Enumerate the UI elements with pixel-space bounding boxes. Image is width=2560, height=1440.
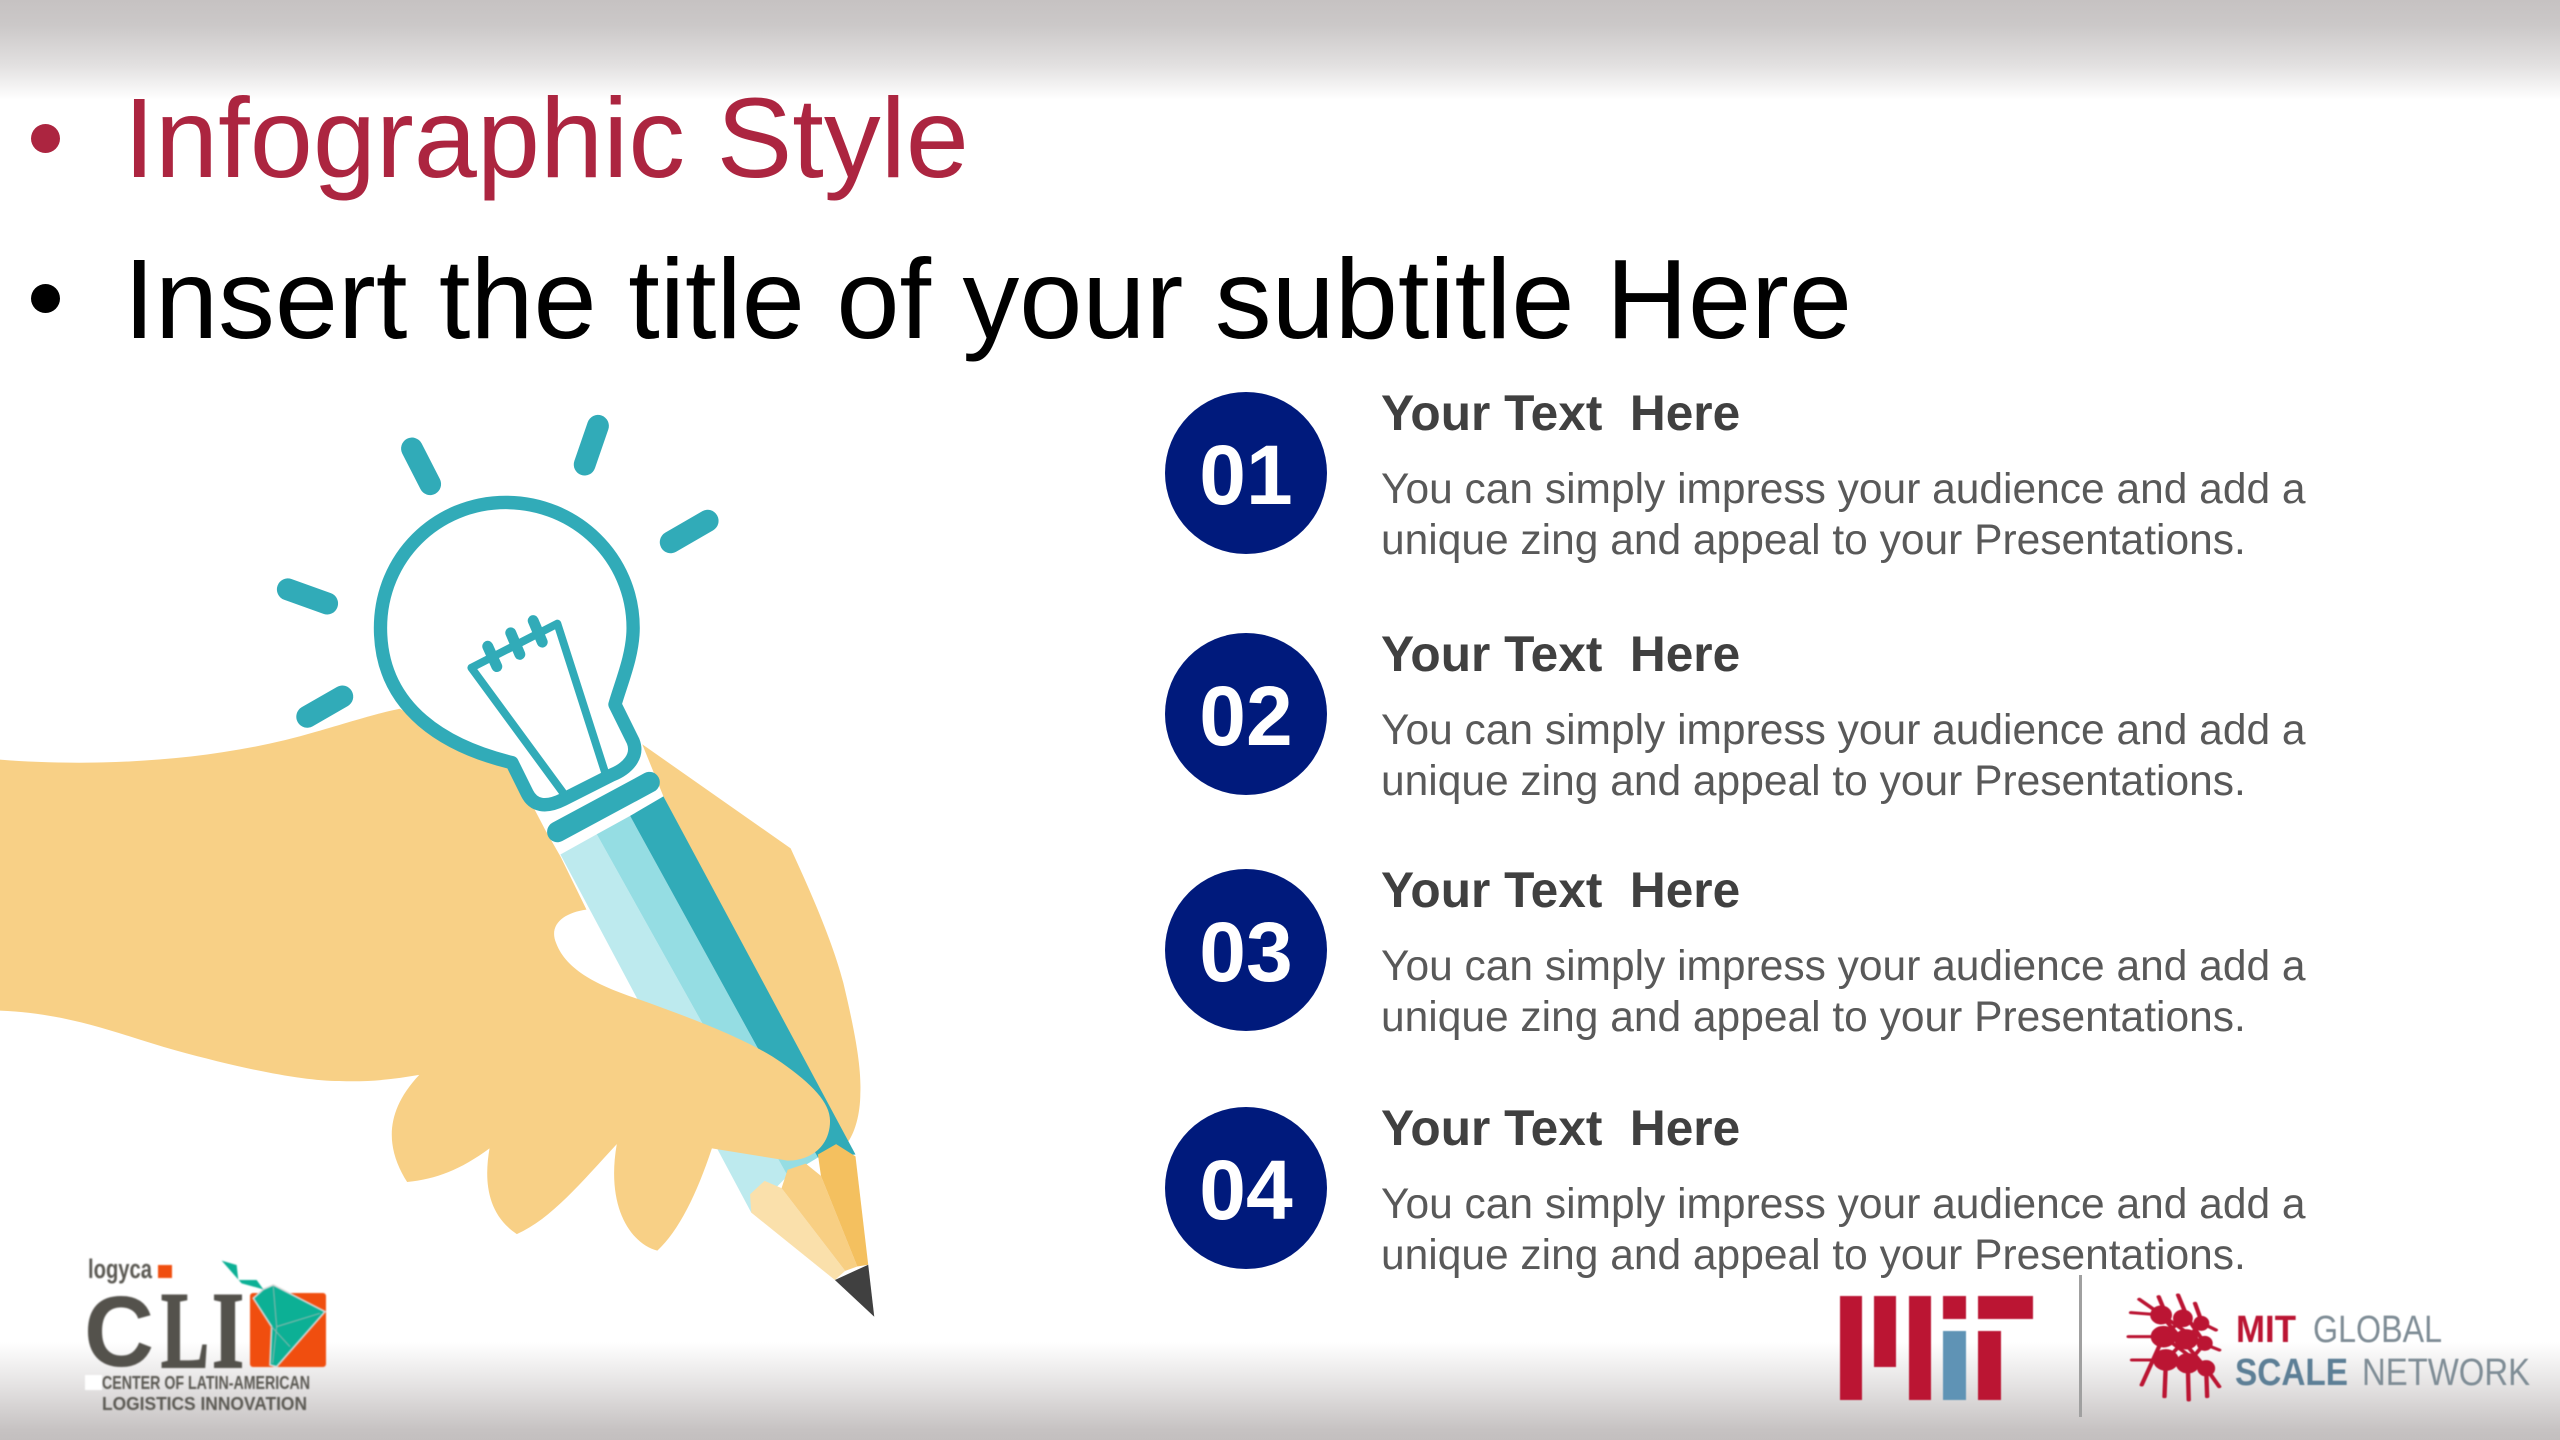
CLI caption line 1: CENTER OF LATIN-AMERICAN	[102, 1373, 310, 1393]
item 03 text: You can simply impress your audience and add a unique zing and appeal to your Presentations.	[1381, 943, 2306, 1041]
hand: front part with fingers	[0, 709, 830, 1251]
item 01	[1165, 385, 2306, 564]
number badge 02: 02	[1199, 669, 1293, 763]
item 03 heading: Your Text Here	[1381, 862, 1740, 918]
light ray 5	[307, 697, 342, 717]
light bulb	[288, 426, 708, 832]
filament	[471, 624, 606, 793]
hand: back part behind pencil	[642, 744, 860, 1145]
GLOBAL label: GLOBAL	[2313, 1309, 2442, 1351]
SCALE label: SCALE	[2235, 1352, 2348, 1394]
item 02 text: You can simply impress your audience and add a unique zing and appeal to your Presentations.	[1381, 707, 2306, 805]
illustration: hand drawing a light bulb with a pencil	[0, 414, 874, 1317]
number badge 04	[1165, 1107, 1327, 1269]
number badge 03	[1165, 869, 1327, 1031]
light ray 1	[412, 449, 430, 484]
item 04 text: You can simply impress your audience and add a unique zing and appeal to your Presentations.	[1381, 1181, 2306, 1279]
title bullet	[31, 124, 60, 153]
CLI letter C: C	[84, 1276, 154, 1388]
number badge 01	[1165, 392, 1327, 554]
item 04	[1165, 1100, 2306, 1279]
item 01 heading: Your Text Here	[1381, 385, 1740, 441]
number badge 03: 03	[1199, 905, 1293, 999]
logyca wordmark: logyca	[88, 1254, 153, 1284]
MIT label: MIT	[2236, 1309, 2296, 1351]
CLI caption line 2: LOGISTICS INNOVATION	[102, 1394, 307, 1414]
number badge 04: 04	[1199, 1143, 1293, 1237]
logyca square	[158, 1265, 172, 1278]
orange square	[250, 1293, 326, 1367]
title: Infographic Style	[124, 75, 969, 202]
subtitle: Insert the title of your subtitle Here	[124, 236, 1852, 363]
item 03	[1165, 862, 2306, 1041]
light ray 2	[585, 426, 598, 464]
number badge 02	[1165, 633, 1327, 795]
item 02	[1165, 626, 2306, 805]
item 04 heading: Your Text Here	[1381, 1100, 1740, 1156]
subtitle bullet	[31, 284, 60, 313]
bulb base	[557, 782, 649, 832]
network icon	[2129, 1295, 2219, 1400]
item 01 text: You can simply impress your audience and add a unique zing and appeal to your Presentations.	[1381, 466, 2306, 564]
Latin America map	[222, 1261, 325, 1367]
item 02 heading: Your Text Here	[1381, 626, 1740, 682]
logo divider	[2079, 1275, 2082, 1417]
CLI letter I: I	[212, 1270, 244, 1391]
light ray 4	[288, 589, 327, 603]
light ray 3	[671, 521, 708, 542]
NETWORK label: NETWORK	[2362, 1352, 2530, 1394]
pencil	[560, 796, 874, 1317]
number badge 01: 01	[1199, 428, 1293, 522]
CLI letter L: L	[161, 1270, 209, 1391]
